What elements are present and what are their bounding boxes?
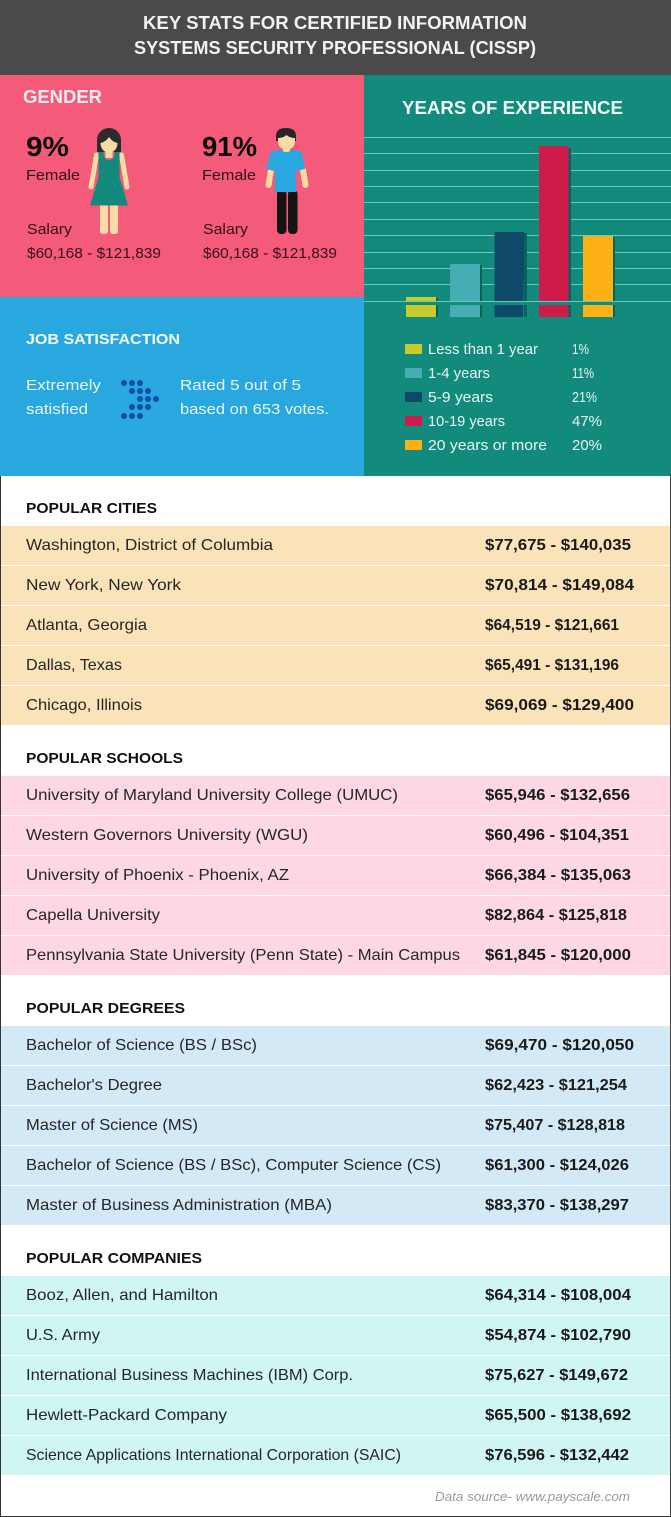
title banner: [0, 0, 671, 75]
icon: woman: [90, 128, 128, 234]
heading: popular companies: POPULAR COMPANIES: [26, 1250, 202, 1267]
section: popular cities: $69,069 - $129,400: [485, 697, 634, 714]
section: popular degrees: $69,470 - $120,050: [485, 1037, 634, 1054]
section: popular schools: $60,496 - $104,351: [485, 827, 629, 844]
legend row: 20 years or more: 20 years or more: [428, 437, 547, 454]
section: popular cities: [0, 500, 671, 725]
rating label: [26, 377, 102, 418]
title banner: SYSTEMS SECURITY PROFESSIONAL (CISSP): [134, 37, 536, 58]
section: popular schools: $82,864 - $125,818: [485, 907, 627, 924]
section: popular companies: Science Applications International Corporation (SAIC): [26, 1447, 401, 1464]
section: popular degrees: $62,423 - $121,254: [485, 1077, 627, 1094]
section: popular degrees: Bachelor of Science (BS / BSc), Computer Science (CS): [26, 1157, 441, 1174]
male stat: $60,168 - $121,839: [203, 245, 337, 262]
title banner: KEY STATS FOR CERTIFIED INFORMATION: [143, 12, 527, 33]
section: popular companies: Booz, Allen, and Hamilton: [26, 1287, 218, 1304]
section: popular degrees: $75,407 - $128,818: [485, 1117, 625, 1134]
rating text: Rated 5 out of 5: [180, 377, 301, 394]
panel: years of experience: [364, 75, 671, 476]
heading: popular schools: POPULAR SCHOOLS: [26, 750, 183, 767]
female stat: [26, 131, 161, 262]
section: popular cities: $70,814 - $149,084: [485, 577, 634, 594]
section: popular cities: $65,491 - $131,196: [485, 657, 619, 674]
section: popular schools: $61,845 - $120,000: [485, 947, 631, 964]
legend row: 20 years or more: 20%: [572, 437, 602, 454]
female stat: Female: [26, 167, 80, 184]
section: popular cities: Atlanta, Georgia: [26, 617, 147, 634]
icon: man: [266, 128, 306, 234]
icon: dotted chevron: [121, 380, 159, 419]
section: popular companies: Hewlett-Packard Company: [26, 1407, 227, 1424]
legend row: 1-4 years: [405, 365, 594, 382]
legend row: 1-4 years: 11%: [572, 365, 594, 382]
section: popular schools: University of Maryland University College (UMUC): [26, 787, 398, 804]
female stat: Salary: [27, 221, 73, 238]
legend row: 5-9 years: 21%: [572, 389, 597, 406]
female stat: 9%: [26, 131, 69, 162]
section: popular degrees: $83,370 - $138,297: [485, 1197, 629, 1214]
section: popular companies: $65,500 - $138,692: [485, 1407, 631, 1424]
section: popular cities: $77,675 - $140,035: [485, 537, 631, 554]
section: popular companies: U.S. Army: [26, 1327, 100, 1344]
legend row: 10-19 years: 10-19 years: [428, 413, 505, 430]
section: popular companies: International Business Machines (IBM) Corp.: [26, 1367, 353, 1384]
section: popular schools: Pennsylvania State University (Penn State) - Main Campus: [26, 947, 460, 964]
legend row: 5-9 years: 5-9 years: [428, 389, 493, 406]
rating label: satisfied: [26, 401, 88, 418]
male stat: [202, 131, 337, 262]
section: popular degrees: $61,300 - $124,026: [485, 1157, 629, 1174]
section: popular degrees: Bachelor of Science (BS / BSc): [26, 1037, 257, 1054]
section: popular degrees: Master of Science (MS): [26, 1117, 198, 1134]
section: popular schools: [0, 750, 671, 975]
section: popular cities: $64,519 - $121,661: [485, 617, 619, 634]
section: popular companies: [0, 1250, 671, 1475]
rating text: based on 653 votes.: [180, 401, 329, 418]
female stat: $60,168 - $121,839: [27, 245, 161, 262]
legend row: 1-4 years: 1-4 years: [428, 365, 490, 382]
male stat: 91%: [202, 131, 257, 162]
bar chart: [364, 137, 671, 317]
section: popular cities: Dallas, Texas: [26, 657, 122, 674]
legend row: less than 1 year: [405, 341, 589, 358]
section: popular cities: New York, New York: [26, 577, 182, 594]
panel: job satisfaction: [0, 297, 364, 476]
legend row: 5-9 years: [405, 389, 597, 406]
section: popular schools: Western Governors University (WGU): [26, 827, 308, 844]
legend: [405, 341, 602, 454]
section: popular degrees: Bachelor's Degree: [26, 1077, 162, 1094]
section: popular cities: Washington, District of Columbia: [26, 537, 273, 554]
male stat: Salary: [203, 221, 249, 238]
heading: popular cities: POPULAR CITIES: [26, 500, 157, 517]
section: popular degrees: [0, 1000, 671, 1225]
data source note: Data source- www.payscale.com: [435, 1490, 630, 1504]
rating label: Extremely: [26, 377, 102, 394]
male stat: Female: [202, 167, 256, 184]
section: popular companies: $75,627 - $149,672: [485, 1367, 628, 1384]
legend row: less than 1 year: Less than 1 year: [428, 341, 538, 358]
heading: popular degrees: POPULAR DEGREES: [26, 1000, 185, 1017]
section: popular schools: $65,946 - $132,656: [485, 787, 630, 804]
section: popular companies: $76,596 - $132,442: [485, 1447, 629, 1464]
section: popular degrees: Master of Business Administration (MBA): [26, 1197, 332, 1214]
section: popular schools: University of Phoenix - Phoenix, AZ: [26, 867, 289, 884]
legend row: less than 1 year: 1%: [572, 341, 589, 358]
legend row: 10-19 years: [405, 413, 602, 430]
heading: years of experience: YEARS OF EXPERIENCE: [402, 98, 623, 118]
rating text: [180, 377, 329, 418]
section: popular companies: $54,874 - $102,790: [485, 1327, 631, 1344]
heading: job satisfaction: JOB SATISFACTION: [26, 331, 180, 348]
heading: gender: GENDER: [23, 87, 102, 107]
section: popular cities: Chicago, Illinois: [26, 697, 142, 714]
panel: gender: [0, 75, 364, 297]
section: popular schools: Capella University: [26, 907, 160, 924]
legend row: 20 years or more: [405, 437, 602, 454]
legend row: 10-19 years: 47%: [572, 413, 602, 430]
section: popular companies: $64,314 - $108,004: [485, 1287, 631, 1304]
section: popular schools: $66,384 - $135,063: [485, 867, 631, 884]
